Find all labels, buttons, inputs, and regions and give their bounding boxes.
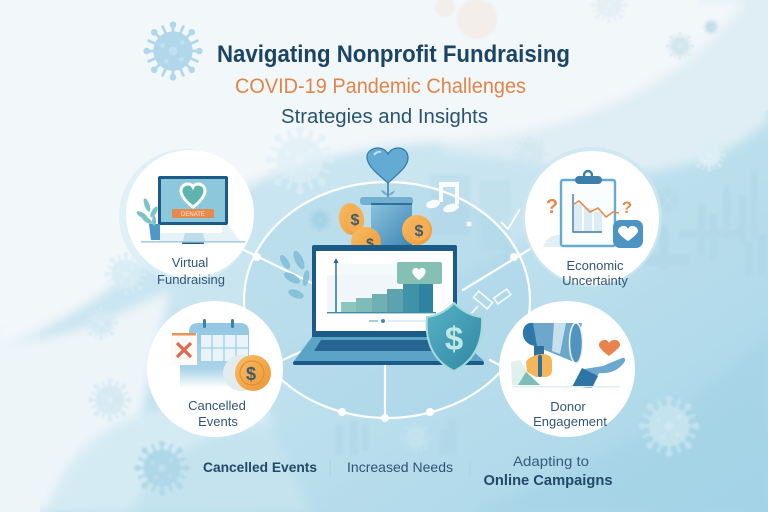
panel: donor engagement: Engagement [533, 414, 607, 429]
panel: economic uncertainty: Uncertainty [562, 273, 628, 288]
item: cancelled events: Cancelled Events [203, 459, 317, 475]
icon: coins: $ [366, 235, 374, 251]
skyline chart backdrop [335, 170, 766, 455]
item: increased needs: Increased Needs [347, 459, 453, 475]
label: Virtual [172, 255, 208, 270]
item: adapting to online campaigns [484, 453, 612, 489]
bottom summary strip [203, 453, 612, 489]
subheading: COVID-19 Pandemic Challenges [235, 75, 526, 98]
panel: cancelled events: Events [198, 414, 238, 429]
label: Economic [566, 258, 624, 273]
panel: cancelled events [147, 301, 283, 437]
label: Cancelled [188, 398, 246, 413]
panel: virtual fundraising: Fundraising [157, 272, 225, 287]
icon: calendar and coin: $ [246, 364, 256, 384]
icon: coins: $ [351, 212, 360, 229]
tagline: Strategies and Insights [281, 106, 488, 128]
item: adapting to online campaigns: Online Campaigns [484, 473, 612, 489]
icon: coins: $ [415, 223, 424, 240]
heading: Navigating Nonprofit Fundraising [217, 41, 570, 68]
label: Donor [550, 399, 586, 414]
title block [145, 23, 570, 128]
leaf decoration [278, 249, 310, 300]
icon: coins [336, 201, 432, 257]
icon: donation pot [360, 197, 413, 246]
icon: music note [425, 182, 460, 214]
icon: clipboard chart: ? [622, 198, 632, 217]
central illustration: laptop, pot, coins, shield [293, 148, 484, 371]
icon: shield with dollar [427, 303, 482, 371]
panel: virtual fundraising [119, 149, 254, 287]
icon: satellite link [470, 289, 511, 315]
icon: clipboard chart: ? [546, 196, 558, 218]
item: adapting to online campaigns: Adapting to [513, 453, 589, 469]
network ring and connectors [240, 182, 540, 422]
icon: desktop monitor with donate: DENATE [181, 212, 205, 218]
icon: heart plant [367, 148, 408, 198]
icon: title virus [145, 23, 201, 79]
icon: shield with dollar: $ [445, 320, 463, 357]
icon: check mark [501, 209, 520, 229]
icon: clipboard chart [543, 171, 643, 248]
panel: economic uncertainty [522, 147, 662, 288]
icon: megaphone and hand [511, 323, 625, 388]
icon: laptop [293, 245, 484, 365]
panel: donor engagement [499, 301, 635, 437]
bar chart [327, 258, 442, 323]
